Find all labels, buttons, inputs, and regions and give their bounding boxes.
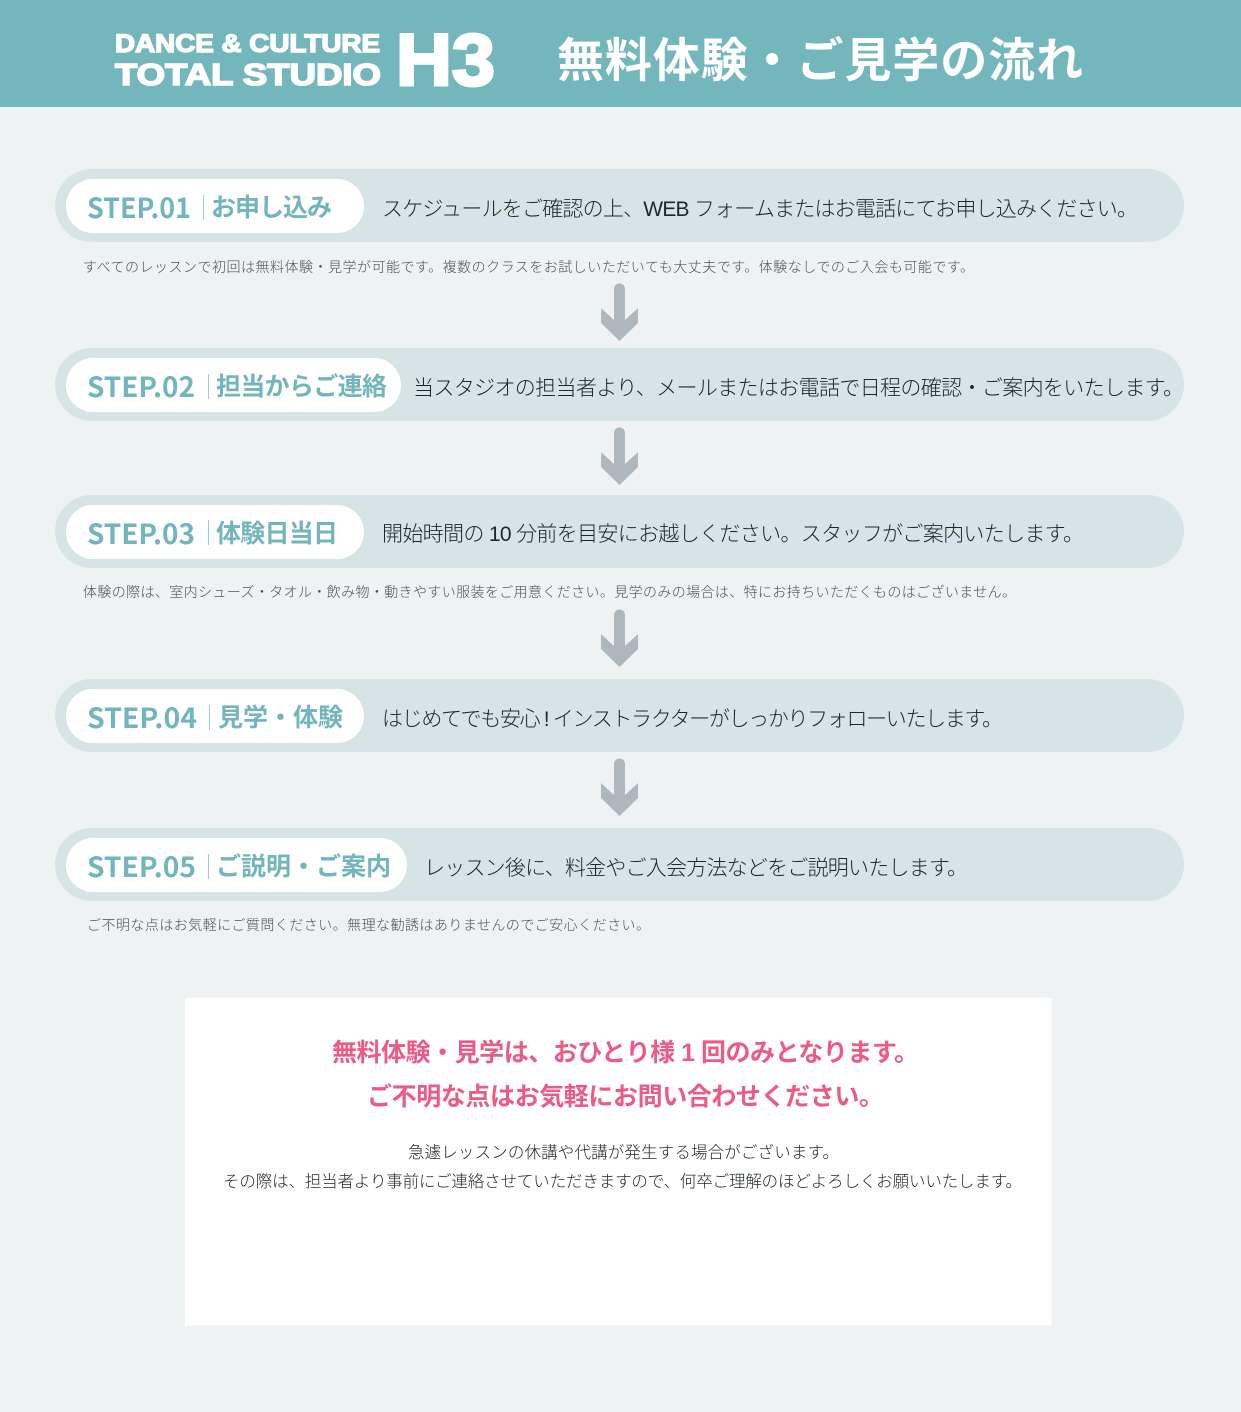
step 3 description: 開始時間の 10 分前を目安にお越しください。スタッフがご案内いたします。 [382, 523, 1084, 546]
step 2 description: 当スタジオの担当者より、メールまたはお電話で日程の確認・ご案内をいたします。 [413, 377, 1184, 400]
step 1 row [55, 169, 1184, 242]
step 4 badge: 見学・体験 [218, 704, 343, 732]
logo: studio name: TOTAL STUDIO [115, 57, 381, 92]
arrow 1 [601, 284, 638, 341]
step 2 badge: STEP.02 [87, 366, 195, 406]
step 1 badge: STEP.01 [87, 187, 191, 227]
notice heading [332, 1039, 919, 1111]
step 4 description: はじめてでも安心 ! インストラクターがしっかりフォローいたします。 [382, 708, 1003, 731]
notice panel [185, 998, 1052, 1326]
step 5 note: ご不明な点はお気軽にご質問ください。無理な勧誘はありませんのでご安心ください。 [87, 917, 650, 933]
step 1 note: すべてのレッスンで初回は無料体験・見学が可能です。複数のクラスをお試しいただいても大丈夫です。体験なしでのご入会も可能です。 [83, 259, 974, 275]
step 2 badge [66, 358, 401, 412]
logo: studio name [115, 30, 381, 92]
notice text: その際は、担当者より事前にご連絡させていただきますので、何卒ご理解のほどよろしくお願いいたします。 [223, 1172, 1022, 1191]
step 5 row [55, 828, 1184, 901]
notice heading: ご不明な点はお気軽にお問い合わせください。 [367, 1082, 884, 1111]
notice text: 急遽レッスンの休講や代講が発生する場合がございます。 [408, 1142, 839, 1162]
step 4 badge [66, 689, 364, 743]
step 3 badge [66, 505, 364, 559]
step 5 badge: STEP.05 [87, 846, 196, 886]
step 5 badge: ご説明・ご案内 [216, 852, 391, 881]
step 3 row [55, 495, 1184, 568]
step 4 badge: STEP.04 [87, 697, 197, 737]
step 1 badge: お申し込み [211, 194, 332, 222]
step 2 badge: 担当からご連絡 [216, 372, 387, 401]
arrow 2 [601, 428, 638, 485]
step 2 row [55, 348, 1184, 421]
step 3 badge: 体験日当日 [216, 520, 338, 548]
step 5 badge [66, 838, 407, 892]
step 4 row [55, 679, 1184, 752]
logo: H3: H3 [396, 20, 495, 101]
arrow 4 [601, 758, 638, 816]
step 1 badge [66, 179, 364, 233]
step 1 description: スケジュールをご確認の上、WEB フォームまたはお電話にてお申し込みください。 [382, 198, 1138, 221]
arrow 3 [601, 610, 638, 667]
step 3 badge: STEP.03 [87, 513, 195, 553]
notice heading: 無料体験・見学は、おひとり様 1 回のみとなります。 [332, 1039, 919, 1067]
step 5 description: レッスン後に、料金やご入会方法などをご説明いたします。 [424, 857, 968, 880]
step 3 note: 体験の際は、室内シューズ・タオル・飲み物・動きやすい服装をご用意ください。見学のみの場合は、特にお持ちいただくものはございません。 [83, 584, 1016, 600]
title: 無料体験・ご見学の流れ [557, 34, 1083, 87]
header banner [0, 0, 1241, 107]
logo: studio name: DANCE & CULTURE [115, 30, 380, 58]
notice text [223, 1142, 1022, 1191]
